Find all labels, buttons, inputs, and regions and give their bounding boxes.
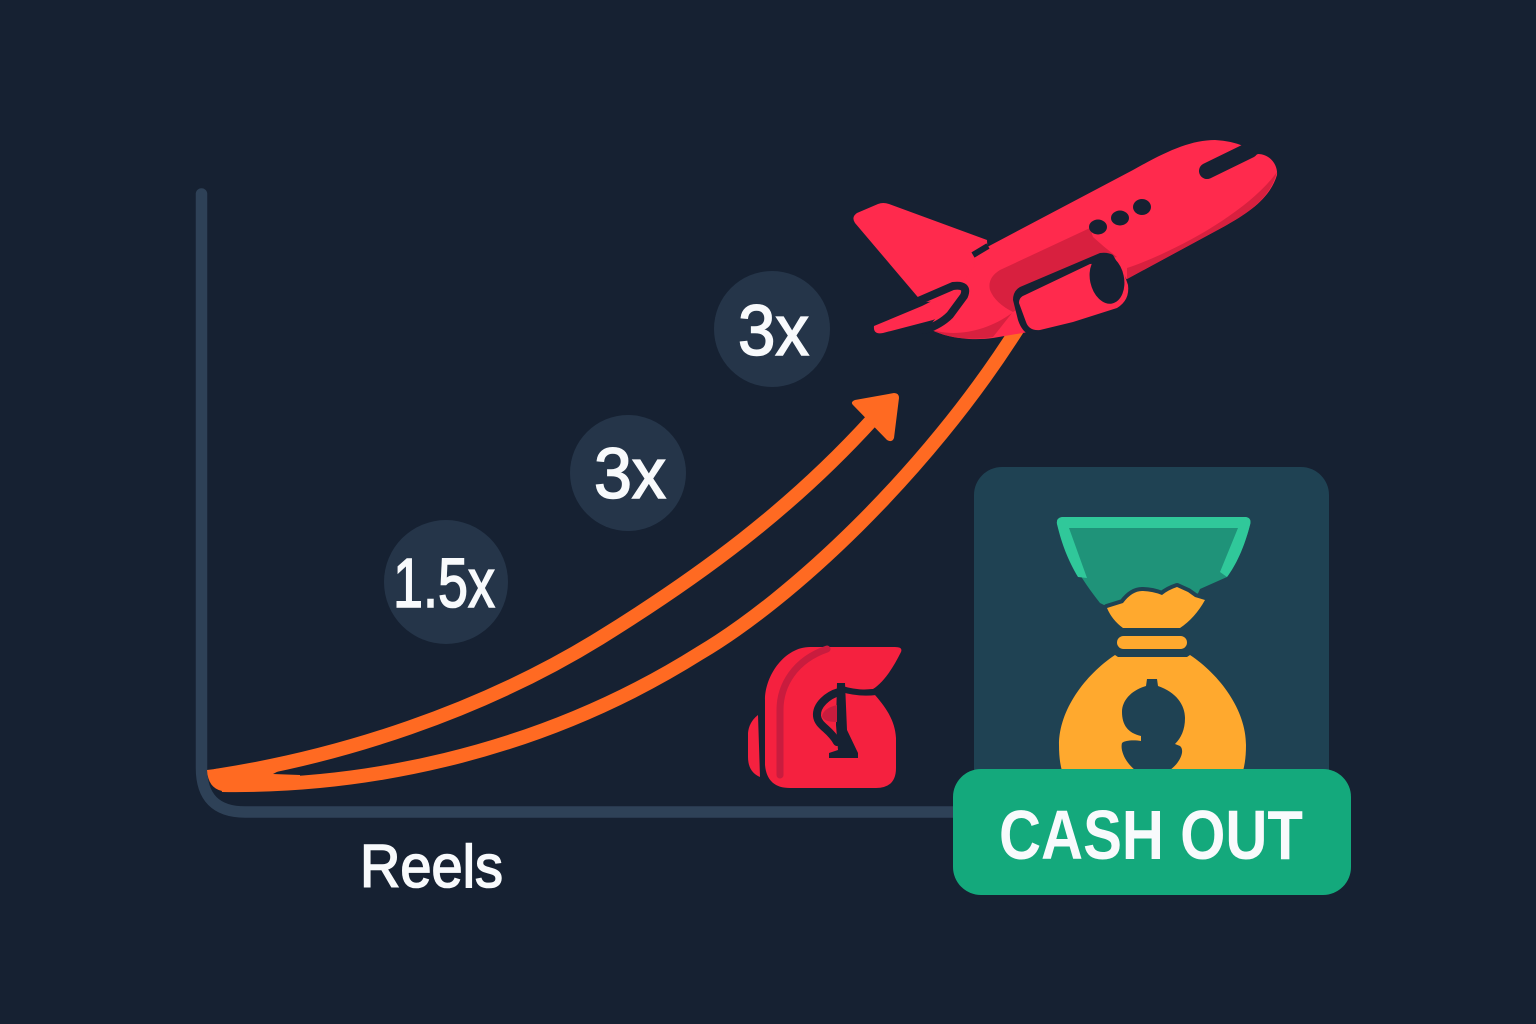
dollar cutout stem (829, 683, 858, 758)
cash out button (953, 769, 1351, 895)
tail fin (853, 203, 990, 302)
green bowl rim (1057, 517, 1250, 578)
engine intake (1085, 251, 1129, 307)
chart axes (202, 194, 960, 812)
windows (1089, 199, 1151, 234)
multiplier badge 3x (top) (714, 271, 830, 387)
wing root shade (989, 228, 1117, 312)
cash out panel (974, 467, 1329, 797)
multiplier badge 3x (top): 3x (738, 292, 809, 371)
dollar sign cutout (1122, 679, 1185, 770)
lower orange curve to plane (222, 328, 1018, 785)
engine (1019, 262, 1128, 330)
lower belly shade (928, 313, 1012, 339)
fuselage (928, 140, 1277, 339)
money bag top (1107, 587, 1205, 628)
multiplier badge 3x (middle) (570, 415, 686, 531)
gap between flap and body (842, 689, 876, 693)
red airplane (853, 140, 1277, 339)
money bag tie (1117, 636, 1187, 649)
upper orange growth arrow (215, 393, 899, 776)
tail seam (973, 246, 988, 255)
cash out button: CASH OUT (999, 796, 1303, 874)
multiplier badge 3x (middle): 3x (594, 435, 666, 514)
multiplier badge 1.5x: 1.5x (393, 544, 495, 622)
belly shade (1127, 172, 1277, 279)
curve origin join (207, 756, 300, 791)
strap stripe (780, 649, 827, 775)
engine outline (1013, 253, 1127, 335)
money bag body (1059, 655, 1246, 780)
stabilizer outline (916, 286, 965, 330)
dollar inner shade (822, 705, 837, 722)
dollar cutout (817, 692, 839, 742)
red backpack icon (748, 647, 901, 788)
green bowl (1057, 517, 1250, 608)
side pocket (748, 715, 760, 777)
stabilizer (874, 292, 958, 333)
cockpit slot (1207, 150, 1250, 171)
axis label: Reels: Reels (360, 833, 503, 900)
multiplier badge 1.5x (384, 520, 508, 644)
